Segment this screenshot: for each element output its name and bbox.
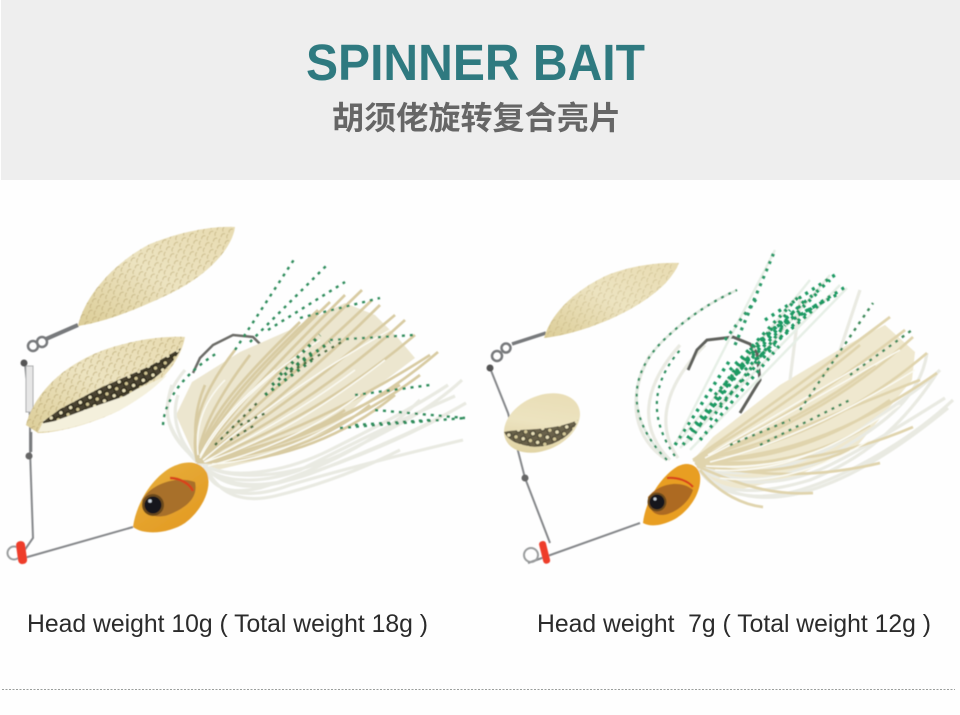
hook <box>688 337 760 413</box>
swivel <box>486 333 546 482</box>
head <box>133 463 208 532</box>
caption: left lure: Head weight 10g ( Total weight 18g ) <box>27 610 428 638</box>
skirt: green dashed strands <box>163 258 465 445</box>
loop and red bead <box>8 541 28 565</box>
wire arm <box>24 363 133 558</box>
blade: lower willow <box>26 337 185 433</box>
skirt base mass <box>693 325 915 492</box>
blade: colorado <box>494 382 590 464</box>
skirt base mass <box>176 303 415 470</box>
skirt: green dashed strands <box>637 250 912 460</box>
skirt: white strands <box>167 370 466 499</box>
hook <box>193 335 267 397</box>
caption: right lure: Head weight 7g ( Total weight 12g ) <box>537 610 931 638</box>
skirt: gaps <box>705 350 915 480</box>
lure: 10g double willow <box>8 227 466 565</box>
head <box>643 464 700 525</box>
skirt: white strands <box>636 290 953 497</box>
blade: upper willow <box>78 227 235 326</box>
wire arm <box>490 368 640 563</box>
skirt: tan strands <box>693 317 937 507</box>
loop and red bead <box>524 540 551 564</box>
subtitle: 胡须佬旋转复合亮片 <box>332 100 621 136</box>
swivel <box>20 325 78 460</box>
skirt: gaps <box>197 330 390 466</box>
lure: 7g willow and colorado <box>486 250 953 564</box>
title: SPINNER BAIT <box>306 34 645 91</box>
header band <box>1 0 960 180</box>
skirt: tan strands <box>195 290 438 462</box>
blade: willow <box>544 263 679 338</box>
